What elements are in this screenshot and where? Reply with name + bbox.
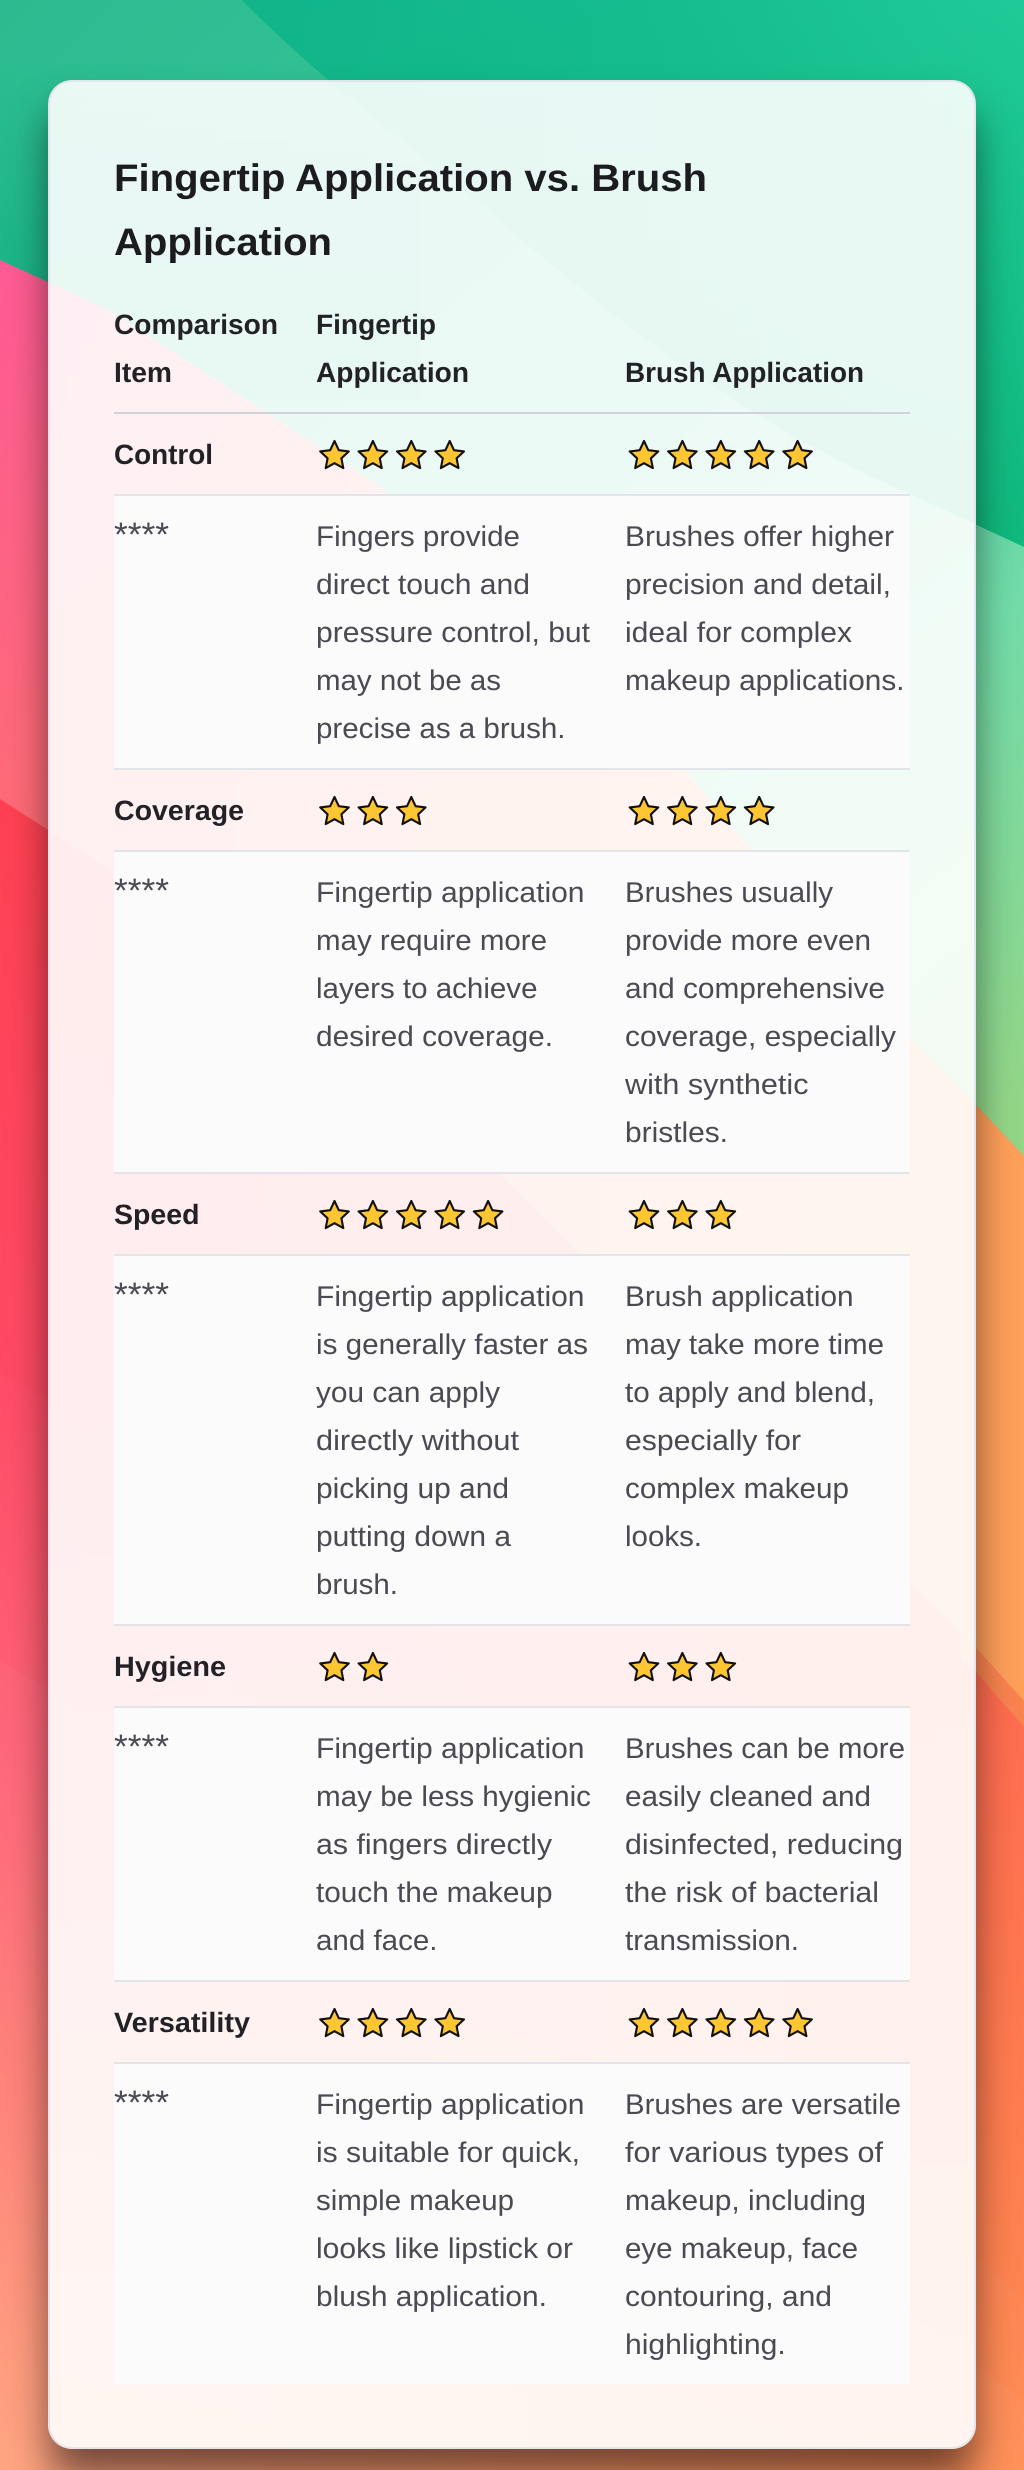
text: brush versatility: highlighting. (625, 2329, 786, 2361)
icon: fingertip control 4 stars (320, 441, 464, 468)
text: brush speed (625, 1281, 884, 1553)
table header row: Brush Application (625, 357, 864, 388)
row: control description: **** (114, 516, 169, 554)
text: brush coverage: Brushes usually (625, 877, 834, 909)
text: fingertip speed: directly without (316, 1425, 519, 1457)
text: brush hygiene: Brushes can be more (625, 1733, 905, 1765)
text: brush coverage: with synthetic (624, 1069, 808, 1101)
icon: fingertip coverage 3 stars (320, 797, 426, 824)
text: fingertip control: pressure control, but (316, 617, 590, 649)
text: fingertip hygiene: and face. (316, 1925, 438, 1957)
row: speed description: **** (114, 1276, 169, 1314)
text: fingertip versatility: blush application. (316, 2281, 547, 2313)
row: coverage description (114, 850, 910, 1172)
text: fingertip hygiene: Fingertip application (316, 1733, 584, 1765)
row: versatility description: **** (114, 2084, 169, 2122)
icon: fingertip speed 5 stars (320, 1201, 502, 1228)
text: fingertip speed: Fingertip application (316, 1281, 584, 1313)
table header row: Application (316, 357, 469, 388)
row: speed ratings (114, 1172, 910, 1230)
text: fingertip versatility: looks like lipstick or (316, 2233, 574, 2265)
text: brush coverage: bristles. (625, 1117, 728, 1149)
text: fingertip control: Fingers provide (316, 521, 520, 553)
text: fingertip coverage: Fingertip application (316, 877, 584, 909)
text: brush versatility (625, 2089, 901, 2361)
text: fingertip speed: picking up and (316, 1473, 509, 1505)
text: fingertip speed: putting down a (316, 1521, 511, 1553)
text: brush coverage: coverage, especially (625, 1021, 897, 1053)
row: coverage ratings: Coverage (114, 795, 244, 826)
text: brush coverage: provide more even (625, 925, 871, 957)
row: speed description (114, 1254, 910, 1624)
text: fingertip versatility: simple makeup (316, 2185, 514, 2217)
title: Application (114, 221, 332, 264)
row: hygiene description (114, 1706, 910, 1980)
icon: brush versatility 5 stars (630, 2009, 812, 2036)
text: fingertip versatility (316, 2089, 584, 2313)
text: brush speed: looks. (625, 1521, 702, 1553)
text: fingertip versatility: is suitable for quick, (316, 2137, 580, 2169)
row: versatility ratings: Versatility (114, 2007, 250, 2038)
text: brush hygiene (625, 1733, 905, 1957)
text: brush hygiene: easily cleaned and (625, 1781, 871, 1813)
text: fingertip hygiene (316, 1733, 591, 1957)
row: hygiene ratings (114, 1624, 910, 1682)
text: fingertip control (316, 521, 590, 745)
icon: brush hygiene 3 stars (630, 1653, 735, 1680)
text: brush speed: may take more time (625, 1329, 884, 1361)
title (114, 157, 707, 264)
text: brush control (625, 521, 904, 697)
text: brush versatility: contouring, and (625, 2281, 832, 2313)
text: brush speed: to apply and blend, (625, 1377, 875, 1409)
row: speed ratings: Speed (114, 1199, 200, 1230)
text: brush speed: Brush application (625, 1281, 854, 1313)
row: control ratings (114, 439, 812, 470)
text: brush coverage (624, 877, 897, 1149)
text: fingertip speed: you can apply (316, 1377, 501, 1409)
row: versatility ratings (114, 1980, 910, 2038)
text: brush versatility: makeup, including (625, 2185, 866, 2217)
table header row: Comparison (114, 309, 278, 340)
row: versatility description (114, 2062, 910, 2384)
text: fingertip versatility: Fingertip application (316, 2089, 584, 2121)
text: brush hygiene: the risk of bacterial (625, 1877, 879, 1909)
text: brush control: ideal for complex (625, 617, 852, 649)
icon: brush control 5 stars (630, 441, 812, 468)
icon: brush coverage 4 stars (630, 797, 774, 824)
row: hygiene ratings: Hygiene (114, 1651, 226, 1682)
text: brush versatility: for various types of (625, 2137, 883, 2169)
table header row (114, 309, 910, 414)
text: fingertip coverage: layers to achieve (316, 973, 538, 1005)
table header row: Item (114, 357, 172, 388)
text: brush control: precision and detail, (625, 569, 891, 601)
text: fingertip hygiene: as fingers directly (316, 1829, 553, 1861)
text: fingertip speed: brush. (316, 1569, 398, 1601)
text: brush speed: especially for (625, 1425, 802, 1457)
icon: brush speed 3 stars (630, 1201, 735, 1228)
text: brush versatility: eye makeup, face (625, 2233, 858, 2265)
row: coverage description: **** (114, 872, 169, 910)
text: fingertip speed: is generally faster as (316, 1329, 588, 1361)
text: fingertip speed (316, 1281, 588, 1601)
text: brush speed: complex makeup (625, 1473, 849, 1505)
text: brush hygiene: disinfected, reducing (625, 1829, 903, 1861)
text: fingertip coverage: desired coverage. (316, 1021, 553, 1053)
row: hygiene description: **** (114, 1728, 169, 1766)
text: fingertip coverage: may require more (316, 925, 547, 957)
row: control description (114, 494, 910, 768)
text: fingertip coverage (316, 877, 584, 1053)
text: fingertip hygiene: touch the makeup (316, 1877, 552, 1909)
text: brush coverage: and comprehensive (625, 973, 885, 1005)
text: brush hygiene: transmission. (625, 1925, 799, 1957)
text: brush control: Brushes offer higher (625, 521, 895, 553)
title: Fingertip Application vs. Brush (114, 157, 707, 200)
icon: fingertip versatility 4 stars (320, 2009, 464, 2036)
text: fingertip control: direct touch and (316, 569, 530, 601)
row: coverage ratings (114, 768, 910, 826)
text: fingertip hygiene: may be less hygienic (316, 1781, 591, 1813)
icon: fingertip hygiene 2 stars (320, 1653, 387, 1680)
text: brush versatility: Brushes are versatile (625, 2089, 901, 2121)
text: fingertip control: may not be as (316, 665, 501, 697)
row: control ratings: Control (114, 439, 213, 470)
table header row: Fingertip (316, 309, 436, 340)
text: fingertip control: precise as a brush. (316, 713, 566, 745)
text: brush control: makeup applications. (625, 665, 904, 697)
